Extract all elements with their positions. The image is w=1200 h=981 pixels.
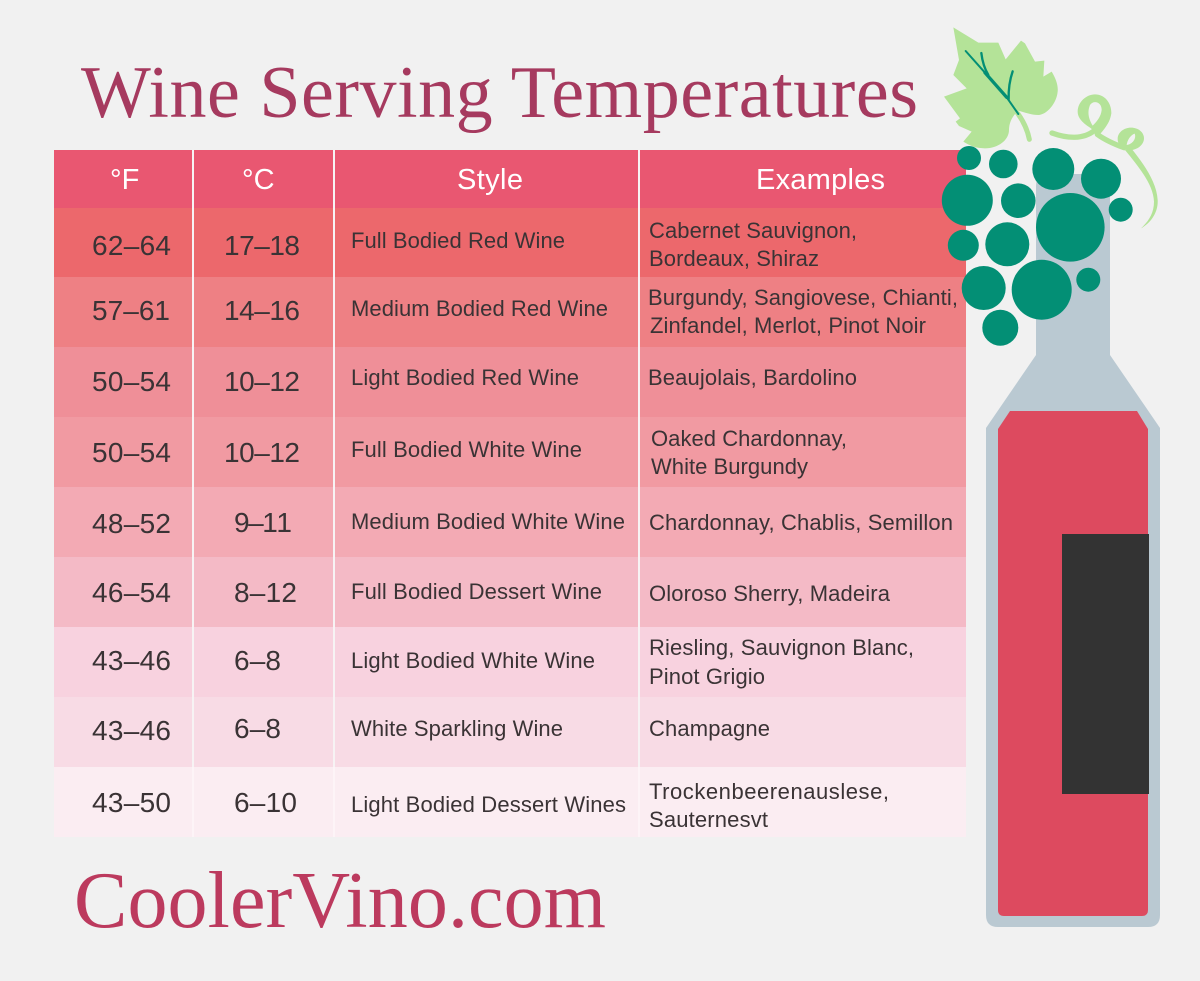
row: medium bodied red: Burgundy, Sangiovese, Chianti,: [648, 285, 958, 310]
grape cluster: [942, 146, 1133, 346]
row: light bodied red: Light Bodied Red Wine: [351, 365, 579, 390]
row: light bodied white: Pinot Grigio: [649, 664, 765, 689]
leaf stem: [1018, 113, 1029, 139]
row: full bodied dessert: 46–54: [92, 577, 171, 608]
row: medium bodied red: Medium Bodied Red Wine: [351, 296, 608, 321]
row: full bodied red: 62–64: [92, 230, 171, 261]
grape leaf: [944, 27, 1058, 148]
row: light bodied white: [92, 635, 914, 689]
bottle label: [1062, 534, 1149, 794]
tendril tail: [1125, 148, 1158, 228]
row: full bodied dessert: 8–12: [234, 577, 297, 608]
row: full bodied white: 50–54: [92, 437, 171, 468]
table header: Style: [457, 164, 523, 196]
row: light bodied red: Beaujolais, Bardolino: [648, 365, 857, 390]
row: light bodied white: Light Bodied White Wine: [351, 648, 595, 673]
row: medium bodied red: Zinfandel, Merlot, Pinot Noir: [650, 313, 926, 338]
row: full bodied dessert: Full Bodied Dessert Wine: [351, 579, 602, 604]
table header: [110, 164, 885, 196]
row: full bodied dessert: [92, 577, 891, 608]
wine temperature table: [54, 150, 966, 837]
tendril strand: [1052, 130, 1124, 148]
row: light bodied red: [92, 365, 857, 397]
row: full bodied red: Full Bodied Red Wine: [351, 228, 565, 253]
row: medium bodied white: 48–52: [92, 508, 171, 539]
row: white sparkling: [92, 713, 770, 746]
small loop: [1118, 128, 1144, 150]
row: light bodied white: Riesling, Sauvignon Blanc,: [649, 635, 914, 660]
footer website name: CoolerVino.com: [74, 857, 606, 945]
row: white sparkling: Champagne: [649, 716, 770, 741]
wine bottle: [986, 174, 1160, 927]
vine tendril: [1052, 94, 1158, 228]
table row backgrounds: [54, 150, 966, 837]
row: light bodied dessert: Sauternesvt: [649, 807, 768, 832]
row: white sparkling: 6–8: [234, 713, 281, 744]
row: full bodied white: 10–12: [224, 437, 300, 468]
table header: °F: [110, 164, 139, 196]
bottle glass: [986, 174, 1160, 927]
row: medium bodied red: [92, 285, 958, 338]
row: full bodied white: [92, 426, 847, 479]
row: medium bodied red: 57–61: [92, 295, 170, 326]
row: full bodied red: Cabernet Sauvignon,: [649, 218, 857, 243]
row: light bodied dessert: 43–50: [92, 787, 171, 818]
leaf veins: [966, 51, 1018, 114]
row: light bodied red: 10–12: [224, 366, 300, 397]
large loop: [1078, 94, 1111, 135]
row: white sparkling: White Sparkling Wine: [351, 716, 563, 741]
row: full bodied dessert: Oloroso Sherry, Madeira: [649, 581, 891, 606]
table header: °C: [242, 164, 275, 196]
row: full bodied white: Oaked Chardonnay,: [651, 426, 847, 451]
title: Wine Serving Temperatures: [81, 52, 918, 134]
row: light bodied dessert: Light Bodied Dessert Wines: [351, 792, 626, 817]
row: full bodied white: Full Bodied White Wine: [351, 437, 582, 462]
row: light bodied white: 43–46: [92, 645, 171, 676]
row: light bodied dessert: [92, 779, 889, 832]
row: light bodied red: 50–54: [92, 366, 171, 397]
leaf blade: [944, 27, 1058, 148]
row: light bodied dessert: Trockenbeerenauslese,: [649, 779, 889, 804]
row: full bodied red: [92, 218, 857, 271]
row: medium bodied white: [92, 507, 953, 539]
row: light bodied dessert: 6–10: [234, 787, 297, 818]
row: medium bodied white: Chardonnay, Chablis, Semillon: [649, 510, 953, 535]
row: medium bodied white: Medium Bodied White Wine: [351, 509, 625, 534]
row: light bodied white: 6–8: [234, 645, 281, 676]
table header: Examples: [756, 164, 885, 196]
row: full bodied white: White Burgundy: [651, 454, 808, 479]
row: full bodied red: 17–18: [224, 230, 300, 261]
row: full bodied red: Bordeaux, Shiraz: [649, 246, 819, 271]
row: medium bodied white: 9–11: [234, 507, 292, 538]
row: white sparkling: 43–46: [92, 715, 171, 746]
row: medium bodied red: 14–16: [224, 295, 300, 326]
wine fill: [998, 411, 1148, 916]
